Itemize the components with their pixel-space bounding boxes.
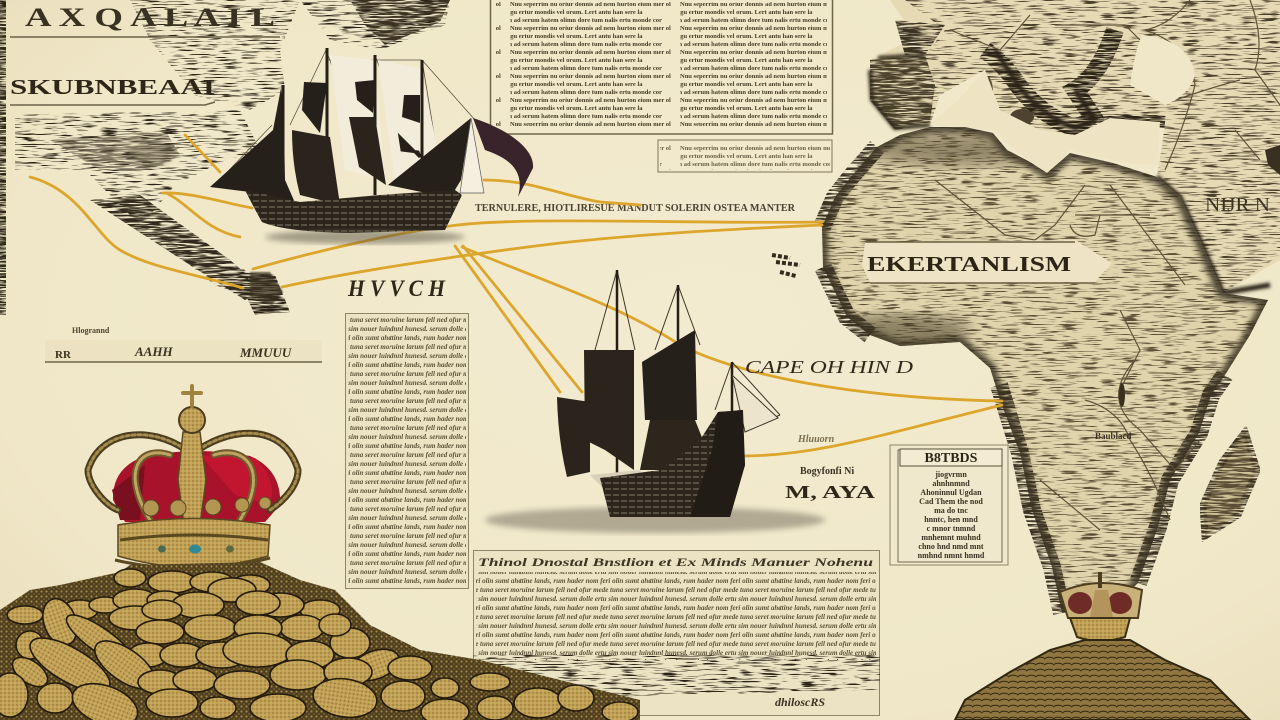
caption strip left [45, 326, 322, 363]
map: western coastline [10, 0, 450, 315]
pearls [143, 497, 271, 516]
lower text panel: Thinol Dnostal Bnstlion et Ex Minds Manuer Nohenu [478, 555, 873, 569]
Mediterranean sea [930, 70, 1160, 173]
coins [0, 569, 638, 720]
cartouche box: nmhnd nmnt hnmd [918, 551, 985, 560]
small crown [1060, 572, 1142, 641]
Africa landmass [822, 127, 1268, 613]
sea caption: Bogyfonfi Ni [800, 466, 854, 477]
ship: upper galleon [210, 48, 533, 244]
cartouche box: Cad Them the nod [919, 497, 983, 506]
band [118, 518, 270, 567]
rigging [595, 270, 780, 430]
caption strip left: RR [55, 349, 72, 361]
map title top left: A X Q A L A I L [25, 3, 275, 32]
pile shadow base [0, 562, 640, 720]
hull [600, 410, 745, 517]
cartouche box: hnntc, hen mnd [924, 515, 978, 524]
map label left: SKUBNBEAAI [10, 75, 215, 99]
Madagascar island [1203, 432, 1257, 536]
black sails [210, 88, 296, 205]
ribbon text: TERNULERE, HIOTLIRESUE MANDUT SOLERIN OSTEA MANTER [475, 202, 796, 214]
orb [179, 407, 205, 433]
cross finial [183, 386, 201, 406]
cartouche box: chno hnd nmd mnt [918, 542, 984, 551]
water wake [265, 230, 465, 244]
gold coin pile [0, 562, 640, 720]
sea [485, 507, 825, 533]
black sails [557, 397, 590, 477]
caption strip left: MMUUU [239, 345, 292, 360]
masts [617, 270, 732, 480]
rivers and borders [935, 180, 1200, 530]
text block: top centre [490, 0, 832, 134]
masts [283, 48, 422, 200]
map label: EKERTANLISM [867, 252, 1071, 276]
crown [88, 386, 298, 569]
cartouche box: jiogvrmn [934, 470, 967, 479]
rigging [215, 50, 475, 185]
pennant [473, 118, 533, 197]
Red Sea and Nile coast [1157, 177, 1270, 293]
lower text panel [473, 550, 880, 716]
lower text panel: dhiloscRS [775, 695, 825, 709]
trade routes [30, 135, 1002, 456]
feathered coast strokes [822, 147, 1225, 613]
ship: lower galleon [485, 270, 825, 533]
text column [346, 314, 468, 588]
sea caption [785, 466, 875, 502]
cartouche box: ahnhnmnd [932, 479, 970, 488]
cartouche box [890, 445, 1008, 565]
label cartouche [862, 240, 1112, 283]
region label: Baublacd [1095, 431, 1132, 441]
Arabia label: NIJR N [1205, 194, 1270, 216]
cartouche box: ma do tnc [934, 506, 968, 515]
centre spine [178, 432, 206, 525]
sea caption: M, AYA [785, 482, 875, 502]
cartouche box: B8TBDS [925, 451, 978, 466]
route label: H V V C H [347, 276, 446, 301]
Africa and Europe map [772, 0, 1280, 620]
hull [245, 190, 462, 233]
arches [88, 433, 298, 520]
velvet [113, 451, 280, 522]
text block: small note [658, 140, 832, 172]
white sails [330, 55, 438, 180]
small sail [732, 375, 778, 432]
left edge border [0, 0, 6, 315]
coastal marks [772, 255, 800, 276]
caption strip left: Hlogrannd [72, 326, 110, 335]
cartouche box: c mnor tnmnd [927, 524, 976, 533]
route label centre: CAPE OH HIN D [745, 357, 913, 377]
small coin pile [955, 640, 1250, 720]
cartouche box: Ahoninnul Ugdan [920, 488, 982, 497]
Africa coastal shading [815, 120, 1275, 620]
jewels [189, 544, 201, 554]
caption strip left: AAHH [134, 344, 173, 359]
small note: Hluuorn [797, 434, 835, 445]
Europe and Asia land [870, 0, 1280, 293]
cartouche box: mnhemnt muhnd [921, 533, 981, 542]
